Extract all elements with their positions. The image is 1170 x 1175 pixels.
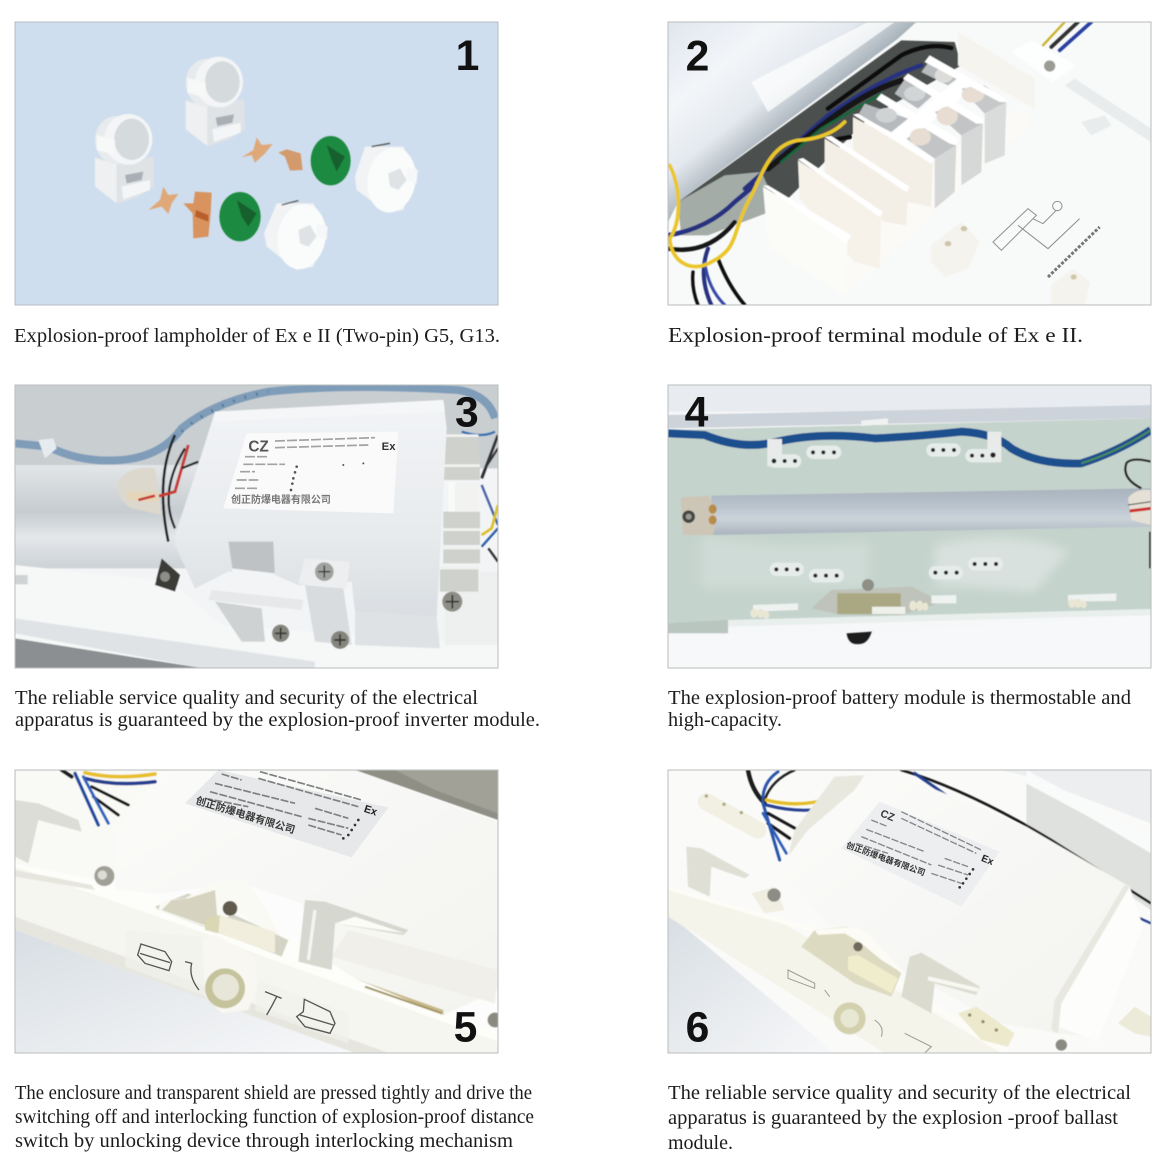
white barriers	[876, 55, 1008, 145]
green rings	[219, 192, 261, 241]
exploded lampholder parts	[95, 57, 421, 273]
terminal tops	[921, 63, 956, 86]
green tray	[668, 418, 1151, 623]
bottom rail	[728, 609, 1151, 627]
sticker icons	[788, 970, 931, 1053]
terminal base	[768, 109, 1031, 295]
product label	[841, 802, 1000, 907]
interlock recess	[155, 893, 288, 957]
number 6: 6	[686, 1004, 709, 1052]
ballast box	[785, 772, 1141, 1037]
number 1: 1	[456, 32, 479, 80]
wires	[62, 770, 155, 825]
clamp with screw	[1041, 44, 1056, 72]
terminal holes	[935, 68, 953, 83]
number 2: 2	[686, 33, 709, 81]
caption 3	[15, 688, 540, 731]
bracket center	[811, 587, 935, 615]
product label: Ex	[382, 441, 396, 453]
hole strip top left	[706, 802, 758, 830]
wires	[748, 770, 1151, 923]
white caps	[264, 203, 327, 270]
caption 6: The reliable service quality and security of the electrical	[668, 1083, 1132, 1104]
caption 5: switch by unlocking device through interlocking mechanism	[15, 1131, 513, 1152]
product label: Ex	[980, 853, 995, 868]
locking recess	[801, 927, 901, 997]
inverter box	[175, 400, 447, 617]
white top strip	[836, 77, 978, 185]
caption 4	[668, 688, 1131, 731]
caption 3: The reliable service quality and security of the electrical	[15, 688, 479, 709]
enclosure	[668, 22, 916, 222]
wiring diagram label	[993, 201, 1100, 277]
fins	[440, 468, 481, 592]
caption 2: Explosion-proof terminal module of Ex e II.	[668, 323, 1083, 347]
caption 4: The explosion-proof battery module is thermostable and	[668, 688, 1131, 709]
caption 6	[668, 1083, 1132, 1154]
fluorescent tube	[711, 488, 1151, 535]
caption 6: module.	[668, 1133, 733, 1154]
product label: 创正防爆电器有限公司	[194, 794, 297, 836]
left clip	[15, 800, 82, 863]
product label: 创正防爆电器有限公司	[845, 840, 927, 878]
number 4: 4	[685, 388, 709, 436]
caption 5	[15, 1083, 534, 1152]
screw	[94, 866, 114, 886]
dark gap under enclosure	[678, 40, 961, 235]
knob	[834, 1002, 866, 1034]
grommets	[931, 222, 980, 277]
lampholder front	[95, 157, 154, 203]
copper contacts	[148, 187, 178, 214]
rail	[668, 890, 1001, 1053]
product label: Ex	[362, 803, 379, 819]
rotary knob	[202, 935, 258, 1013]
product label: CZ	[879, 808, 897, 824]
right lamp holder	[1128, 490, 1151, 525]
number 3: 3	[455, 388, 479, 436]
panel 6: ballast module photo	[668, 770, 1151, 1053]
product label	[223, 432, 398, 513]
hole strip bottom	[958, 1007, 1015, 1047]
caption 4: high-capacity.	[668, 710, 782, 731]
sticker	[125, 930, 205, 997]
product label: 创正防爆电器有限公司	[231, 493, 331, 506]
module box	[334, 770, 498, 1014]
caption 1: Explosion-proof lampholder of Ex e II (Two-pin) G5, G13.	[14, 326, 500, 347]
panel 3: inverter module photo	[15, 385, 498, 668]
lampholder rear	[186, 57, 245, 146]
panel 5: distance switch photo	[15, 770, 502, 1053]
screw mount	[751, 887, 785, 913]
product label: CZ	[248, 439, 269, 456]
caption 3: apparatus is guaranteed by the explosion-proof inverter module.	[15, 710, 540, 731]
product label	[185, 770, 388, 857]
lampholder end	[118, 468, 162, 515]
number 5: 5	[454, 1004, 477, 1052]
panel 4: battery module photo	[668, 385, 1151, 668]
latch right	[298, 900, 408, 970]
caption 5: The enclosure and transparent shield are pressed tightly and drive the	[15, 1083, 532, 1104]
screws	[272, 625, 289, 642]
panel 2: terminal module photo	[668, 22, 1151, 305]
interlock icons	[138, 944, 335, 1033]
left clip	[686, 847, 750, 897]
spiral wires	[15, 387, 498, 562]
cable clips	[767, 439, 782, 466]
left lamp holder	[681, 496, 715, 535]
mount bracket	[299, 559, 349, 584]
clip	[208, 590, 303, 610]
terminal fronts	[985, 102, 1006, 164]
clips	[753, 603, 798, 612]
white body	[15, 867, 498, 1053]
caption 6: apparatus is guaranteed by the explosion -proof ballast	[668, 1108, 1119, 1129]
wires	[668, 22, 1091, 305]
caption 5: switching off and interlocking function of explosion-proof distance	[15, 1107, 534, 1128]
hole strips	[775, 450, 996, 576]
panel 1: lampholder parts photo	[15, 22, 498, 305]
blue spiral wire	[668, 430, 1151, 463]
latch	[901, 953, 980, 1013]
